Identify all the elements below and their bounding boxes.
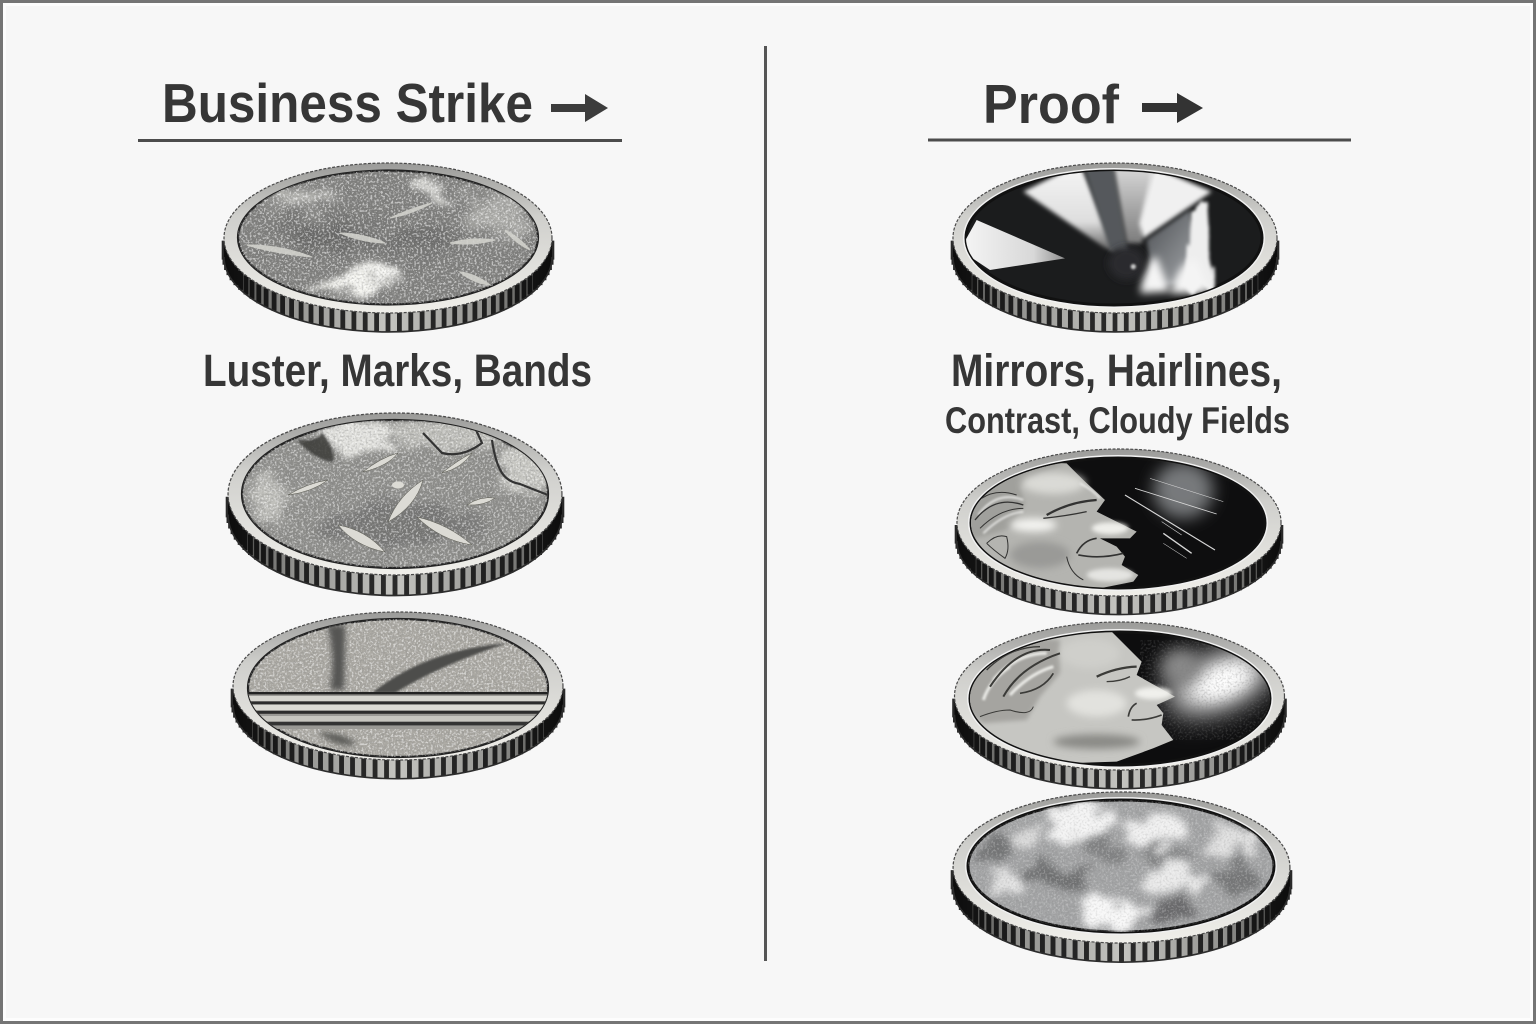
panel: business strike (138, 72, 622, 779)
label: luster marks bands: Luster, Marks, Bands (203, 345, 592, 396)
coin: hairlines portrait (957, 449, 1281, 615)
heading: business strike: Business Strike (162, 72, 533, 134)
portrait head (960, 630, 1175, 767)
label: contrast cloudy fields: Contrast, Cloudy Fields (945, 400, 1290, 441)
portrait head (960, 460, 1138, 588)
coin: marks (228, 413, 562, 596)
heading: proof: Proof (983, 73, 1120, 135)
heading rule: business strike (138, 139, 622, 142)
coin: contrast portrait (955, 622, 1284, 789)
heading rule: proof (928, 138, 1351, 142)
coin: bands (233, 612, 563, 779)
coin: luster (224, 163, 552, 332)
arrow: business strike (551, 94, 608, 122)
coin: mirrors (953, 163, 1277, 332)
center divider (764, 46, 767, 961)
arrow: proof (1142, 93, 1203, 123)
coin: cloudy fields (953, 792, 1290, 962)
panel: proof (928, 73, 1351, 962)
label: mirrors hairlines: Mirrors, Hairlines, (951, 345, 1282, 396)
